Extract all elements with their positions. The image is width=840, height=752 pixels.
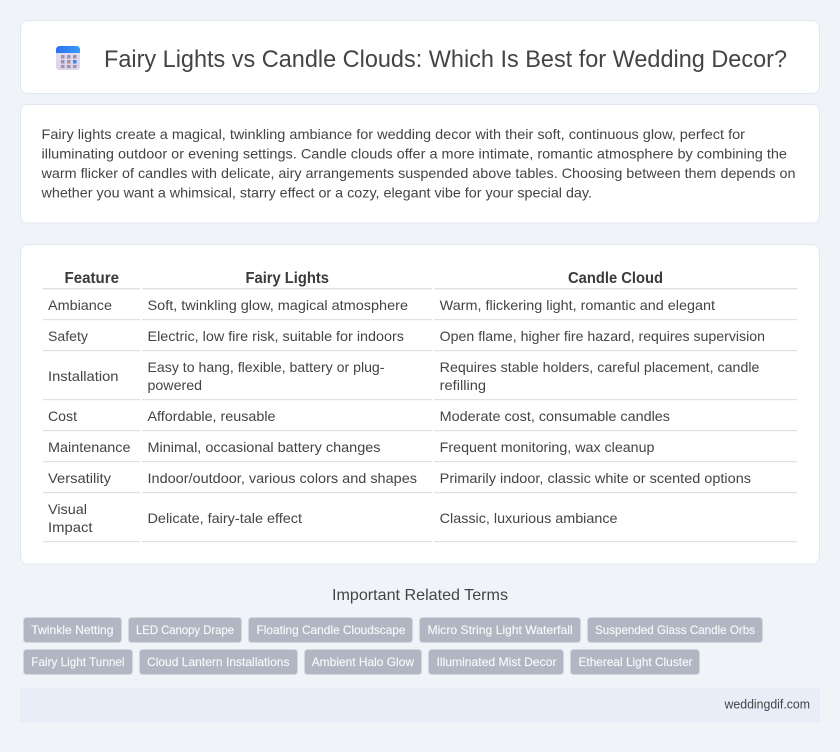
tag: Twinkle Netting bbox=[24, 618, 122, 642]
table row: Visual Impact: Classic, luxurious ambiance bbox=[440, 510, 618, 526]
footer bar bbox=[20, 688, 820, 722]
table row: Versatility: Primarily indoor, classic white or scented options bbox=[440, 470, 751, 486]
intro paragraph: Fairy lights create a magical, twinkling ambiance for wedding decor with their soft, continuous glow, perfect for bbox=[42, 126, 745, 142]
tag: Ethereal Light Cluster bbox=[570, 650, 700, 674]
table row: Safety bbox=[43, 328, 797, 351]
table row: Maintenance bbox=[43, 439, 797, 462]
table row: Visual Impact: Delicate, fairy-tale effect bbox=[148, 510, 302, 526]
table row: Visual Impact bbox=[43, 501, 797, 542]
tag: LED Canopy Drape: LED Canopy Drape bbox=[136, 623, 234, 637]
table row: Ambiance: Soft, twinkling glow, magical atmosphere bbox=[148, 297, 408, 313]
table header row: Feature bbox=[64, 270, 119, 287]
heading: Important Related Terms: Important Related Terms bbox=[332, 587, 508, 604]
table row: Installation: powered bbox=[148, 377, 202, 393]
table row: Installation: Installation bbox=[48, 368, 118, 384]
intro paragraph: warm flicker of candles with delicate, airy arrangements suspended above tables. Choosing between them depends on bbox=[40, 165, 796, 181]
tag: Cloud Lantern Installations: Cloud Lantern Installations bbox=[147, 655, 290, 669]
tag: Fairy Light Tunnel bbox=[24, 650, 132, 674]
table row: Installation: Easy to hang, flexible, battery or plug- bbox=[148, 359, 385, 375]
title: Fairy Lights vs Candle Clouds: Which Is Best for Wedding Decor? bbox=[104, 46, 787, 73]
table row: Maintenance: Minimal, occasional battery changes bbox=[148, 439, 380, 455]
table row: Installation bbox=[43, 359, 797, 400]
table row: Ambiance: Warm, flickering light, romantic and elegant bbox=[440, 297, 715, 313]
table row: Visual Impact: Visual bbox=[48, 501, 87, 517]
tag: Floating Candle Cloudscape: Floating Candle Cloudscape bbox=[256, 623, 406, 637]
tag: Ethereal Light Cluster: Ethereal Light Cluster bbox=[578, 655, 692, 669]
table row: Cost: Affordable, reusable bbox=[148, 408, 276, 424]
table row: Ambiance: Ambiance bbox=[48, 297, 112, 313]
tag: Ambient Halo Glow bbox=[304, 650, 422, 674]
table row: Safety: Electric, low fire risk, suitable for indoors bbox=[148, 328, 404, 344]
tag: Fairy Light Tunnel: Fairy Light Tunnel bbox=[31, 655, 124, 669]
tag: Micro String Light Waterfall: Micro String Light Waterfall bbox=[428, 623, 573, 637]
tag: Suspended Glass Candle Orbs: Suspended Glass Candle Orbs bbox=[595, 623, 755, 637]
panel: comparison table card bbox=[20, 244, 820, 564]
tag: LED Canopy Drape bbox=[128, 618, 242, 642]
panel: intro text card bbox=[20, 104, 820, 223]
tag: Ambient Halo Glow: Ambient Halo Glow bbox=[312, 655, 414, 669]
table row: Installation: refilling bbox=[440, 377, 486, 393]
table row: Ambiance bbox=[43, 297, 797, 320]
table row: Versatility: Versatility bbox=[48, 470, 111, 486]
tag: Illuminated Mist Decor bbox=[428, 650, 564, 674]
table header row: Candle Cloud bbox=[568, 270, 663, 287]
table row: Visual Impact: Impact bbox=[48, 519, 93, 535]
table row: Safety: Safety bbox=[48, 328, 88, 344]
table row: Cost bbox=[43, 408, 797, 431]
table header row bbox=[43, 270, 797, 290]
tag: Suspended Glass Candle Orbs bbox=[588, 618, 762, 642]
table row: Maintenance: Maintenance bbox=[48, 439, 131, 455]
intro paragraph bbox=[40, 126, 796, 200]
table row: Versatility bbox=[43, 470, 797, 493]
panel: title card bbox=[20, 20, 820, 94]
intro paragraph: illuminating outdoor or evening settings. Candle clouds offer a more intimate, romantic atmosphere by combining the bbox=[42, 146, 787, 162]
intro paragraph: whether you want a whimsical, starry effect or a cozy, elegant vibe for your special day. bbox=[40, 184, 592, 200]
table row: Safety: Open flame, higher fire hazard, requires supervision bbox=[440, 328, 765, 344]
tag: Micro String Light Waterfall bbox=[420, 618, 580, 642]
tag: Twinkle Netting: Twinkle Netting bbox=[31, 623, 113, 637]
related term tags bbox=[24, 618, 762, 674]
tag: Floating Candle Cloudscape bbox=[248, 618, 412, 642]
table header row: Fairy Lights bbox=[246, 270, 329, 287]
tag: Cloud Lantern Installations bbox=[140, 650, 298, 674]
footer source text: weddingdif.com bbox=[724, 698, 810, 712]
table row: Maintenance: Frequent monitoring, wax cleanup bbox=[440, 439, 655, 455]
table row: Installation: Requires stable holders, careful placement, candle bbox=[440, 359, 760, 375]
table row: Versatility: Indoor/outdoor, various colors and shapes bbox=[148, 470, 417, 486]
tag: Illuminated Mist Decor: Illuminated Mist Decor bbox=[436, 655, 556, 669]
table row: Cost: Moderate cost, consumable candles bbox=[440, 408, 670, 424]
icon: calendar bbox=[56, 46, 80, 70]
table row: Cost: Cost bbox=[48, 408, 77, 424]
